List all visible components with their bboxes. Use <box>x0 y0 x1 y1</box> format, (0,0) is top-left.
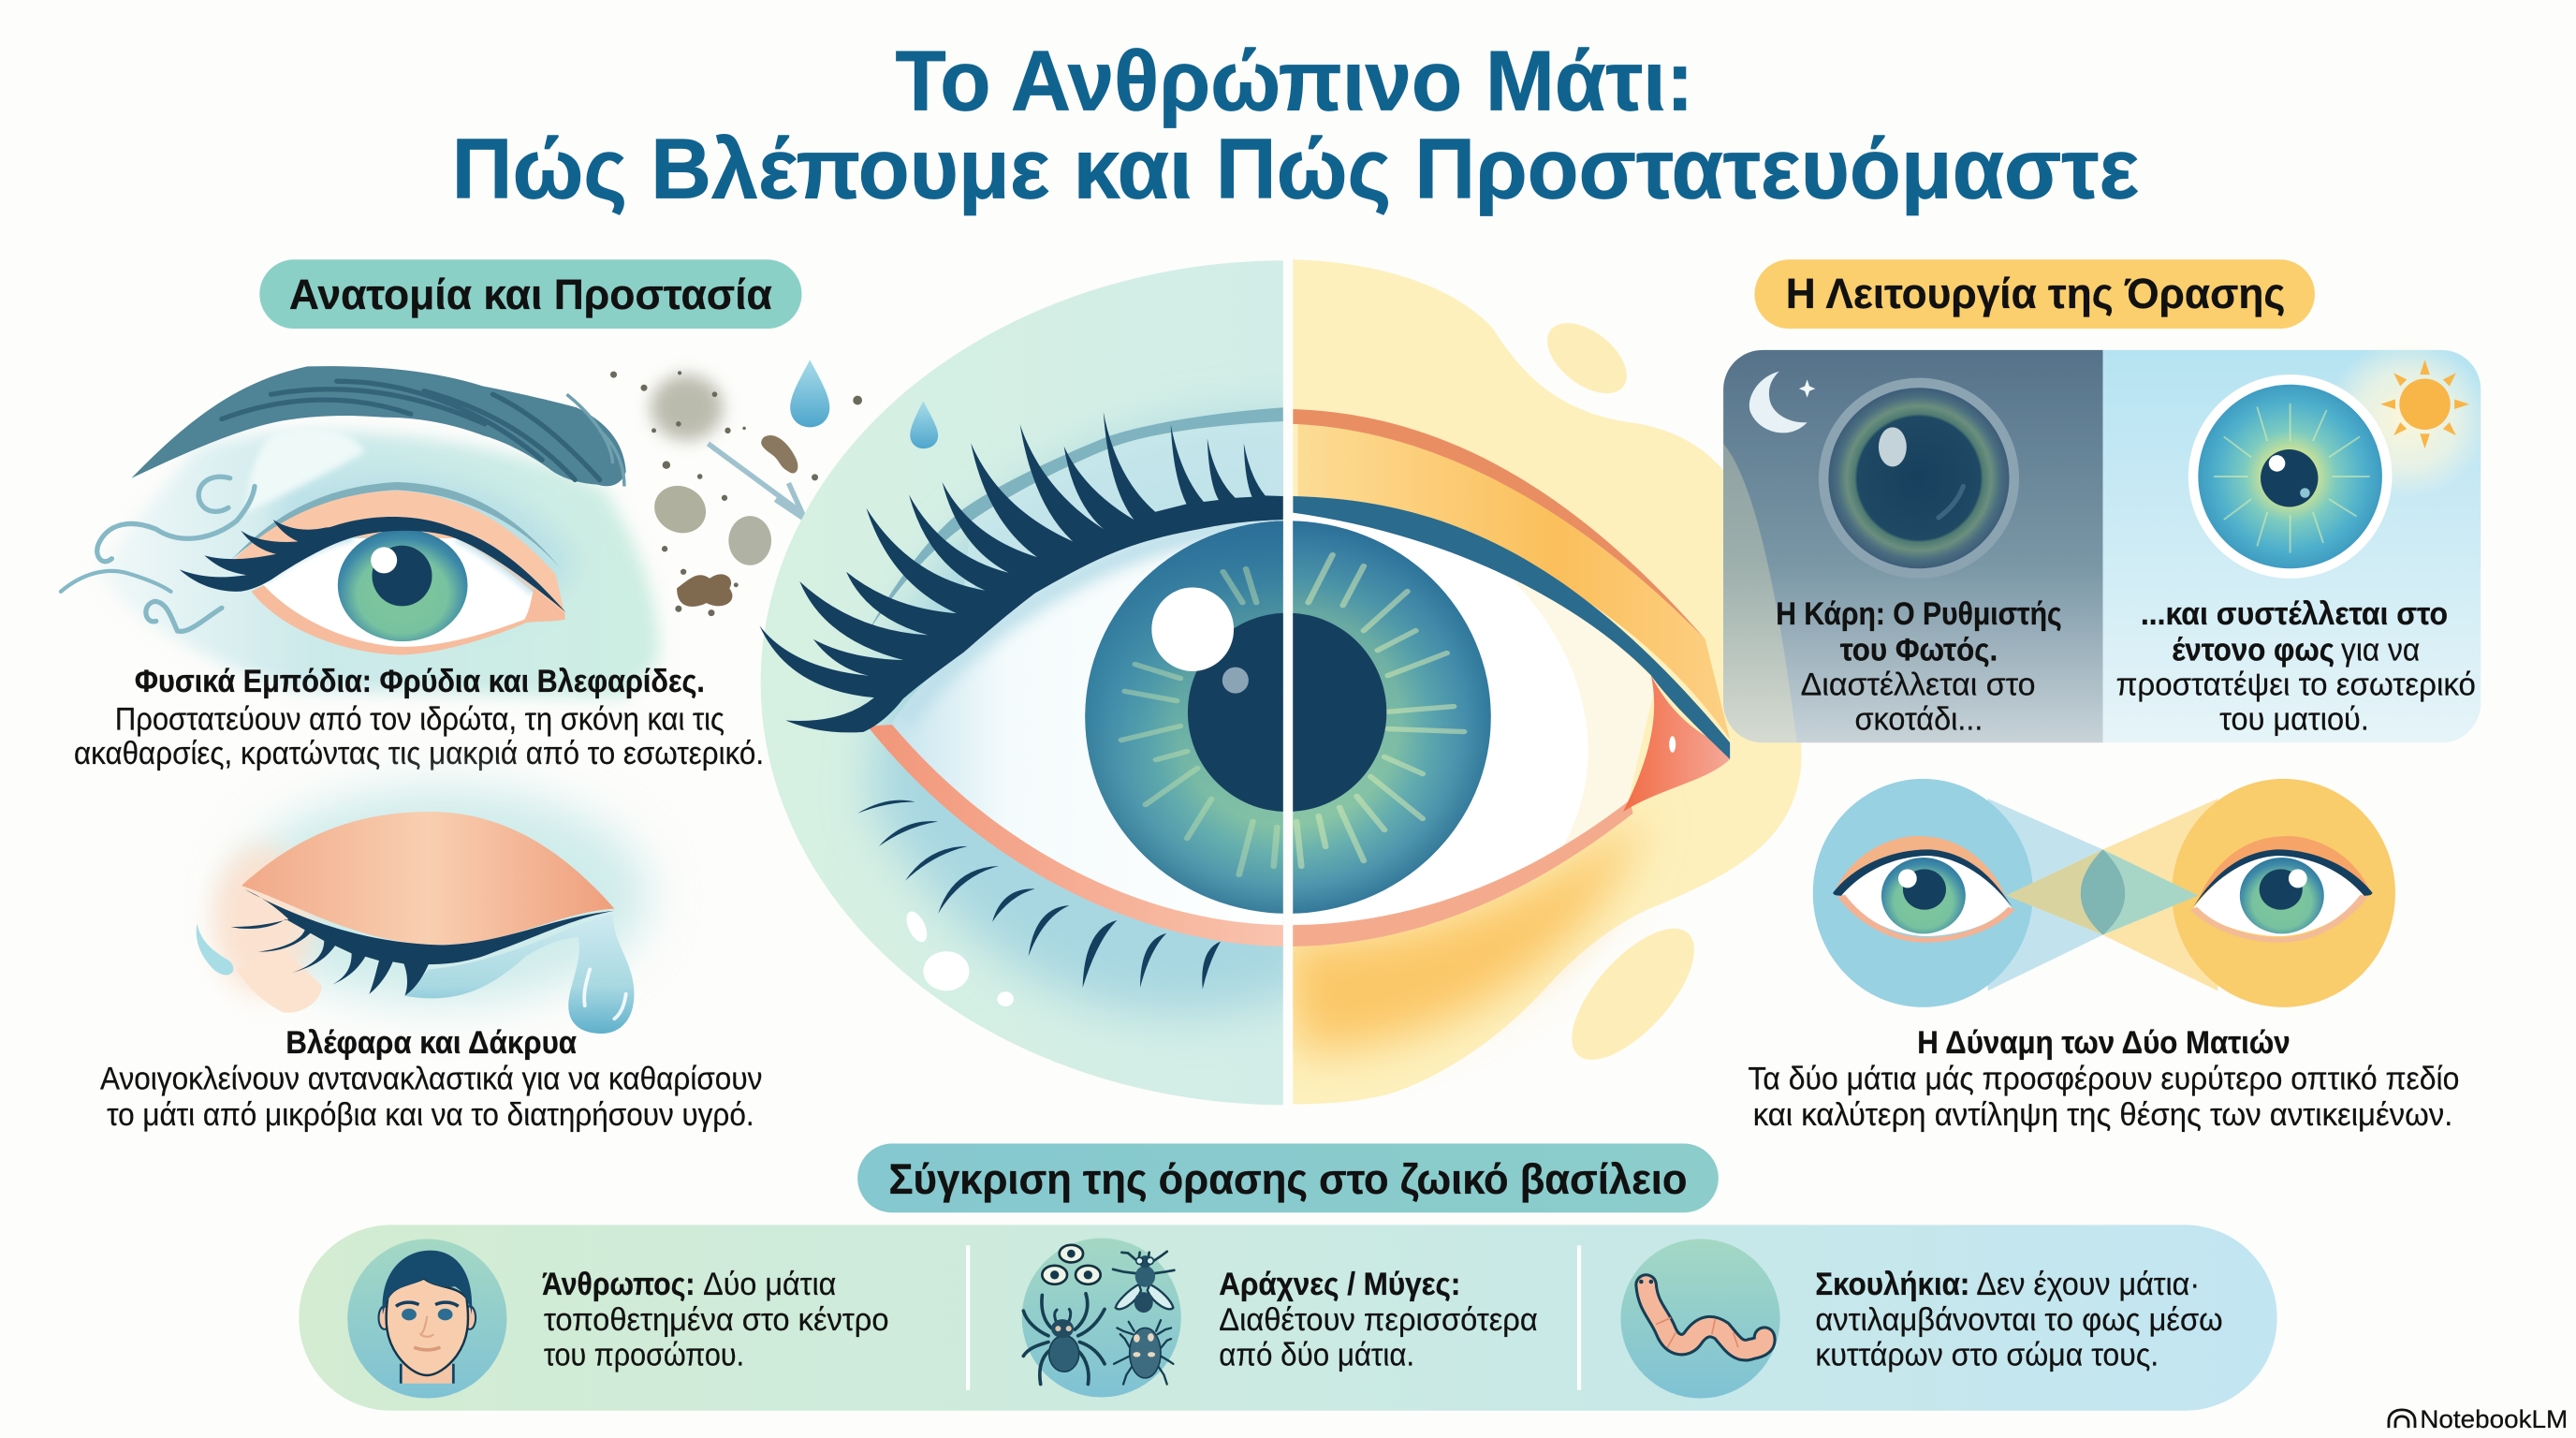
sun <box>2380 360 2469 448</box>
heading pill: anatomy and protection <box>259 259 801 329</box>
eye white left <box>887 513 1288 927</box>
divider <box>1577 1245 1581 1390</box>
right eye <box>2193 836 2372 940</box>
eye white <box>262 538 534 648</box>
dilated pupil eye <box>1819 378 2019 579</box>
eye in detail <box>180 482 566 654</box>
crease line <box>867 407 1286 634</box>
fly <box>1113 1252 1174 1313</box>
left eye <box>1833 836 2012 940</box>
text: worms: Σκουλήκια: <box>1815 1267 1969 1302</box>
illustration: open eye with brow <box>61 366 659 698</box>
left field circle <box>1813 779 2033 1007</box>
lash band <box>231 889 614 995</box>
night side <box>1723 350 2102 743</box>
text: pupil dilates: σκοτάδι... <box>1855 701 1983 737</box>
tear pool and drop <box>404 914 634 1034</box>
icon: worm <box>1620 1239 1780 1399</box>
eye white right <box>1288 513 1656 927</box>
text: pupil contracts <box>2116 596 2476 737</box>
pupil highlight <box>1151 587 1234 671</box>
panel: pupil day and night <box>1723 350 2481 743</box>
text: humans <box>542 1267 889 1372</box>
heading pill: function of vision <box>1754 259 2315 329</box>
iris <box>338 529 468 641</box>
text: pupil dilates: Η Κάρη: Ο Ρυθμιστής <box>1776 596 2062 632</box>
face skin <box>98 432 659 698</box>
small yellow blob top <box>1534 309 1639 407</box>
peach eyelid <box>232 491 565 615</box>
pale lid area under crease <box>964 421 1286 590</box>
overlap <box>2006 849 2103 935</box>
caruncle <box>1623 675 1730 812</box>
upper lid and lashes <box>180 517 566 612</box>
left visual cone <box>1988 799 2103 990</box>
text: humans: Άνθρωπος: <box>542 1267 695 1302</box>
text block: eyelids and tears <box>100 1025 762 1133</box>
text: humans: τοποθετημένα στο κέντρο <box>544 1302 889 1338</box>
illustration: dust and debris <box>610 371 862 616</box>
text: pupil dilates <box>1776 596 2062 737</box>
panel: animal comparison band <box>299 1225 2277 1411</box>
text block: physical barriers: Προστατεύουν από τον ιδρώτα, τη σκόνη και τις <box>115 701 724 737</box>
icon: human face <box>347 1239 506 1399</box>
text: spiders and flies <box>1219 1267 1538 1372</box>
text block: power of two eyes: Η Δύναμη των Δύο Ματιών <box>1917 1025 2291 1061</box>
central eye: left half, protection <box>760 260 1283 1105</box>
text: pupil dilates: του Φωτός. <box>1840 633 1998 668</box>
icon: spiders and flies <box>1022 1238 1181 1398</box>
droplet near dust <box>790 360 829 427</box>
day side <box>2103 340 2489 742</box>
text block: physical barriers: Φυσικά Εμπόδια: Φρύδια και Βλεφαρίδες. <box>135 664 705 699</box>
heading pill: function of vision: Η Λειτουργία της Όρασης <box>1786 270 2285 317</box>
text: pupil contracts: έντονο φως <box>2172 633 2334 668</box>
text: spiders and flies: Διαθέτουν περισσότερα <box>1219 1302 1538 1338</box>
text: worms: αντιλαμβάνονται το φως μέσω <box>1815 1302 2223 1338</box>
text: spiders and flies: από δύο μάτια. <box>1219 1337 1414 1372</box>
upper lid teal <box>1293 496 1730 759</box>
lid crease <box>231 482 561 568</box>
illustration: binocular vision <box>1813 779 2395 1007</box>
skin bit <box>237 945 322 1013</box>
right visual cone <box>2103 799 2217 990</box>
small droplet <box>910 401 938 448</box>
text block: eyelids and tears: Βλέφαρα και Δάκρυα <box>285 1025 577 1061</box>
constricted pupil eye <box>2188 374 2392 579</box>
text block: power of two eyes: Τα δύο μάτια μάς προσφέρουν ευρύτερο οπτικό πεδίο <box>1748 1062 2459 1097</box>
divider <box>966 1245 970 1390</box>
title <box>452 34 2139 216</box>
aqua swirl <box>197 923 233 975</box>
text block: power of two eyes: και καλύτερη αντίληψη της θέσης των αντικειμένων. <box>1753 1097 2452 1133</box>
spider <box>1023 1294 1105 1385</box>
moon and star <box>1749 372 1808 433</box>
text block: eyelids and tears: Ανοιγοκλείνουν αντανακλαστικά για να καθαρίσουν <box>100 1062 762 1097</box>
title: Το Ανθρώπινο Μάτι: <box>896 34 1694 129</box>
lower rim <box>868 725 1288 946</box>
text block: physical barriers <box>74 664 764 771</box>
text: humans: του προσώπου. <box>544 1337 744 1372</box>
lower rim and corner <box>251 585 565 654</box>
text: worms <box>1815 1267 2223 1372</box>
text: pupil contracts: του ματιού. <box>2219 701 2369 737</box>
text: humans: Δύο μάτια <box>703 1267 836 1302</box>
text: pupil dilates: Διαστέλλεται στο <box>1801 667 2036 702</box>
heading pill: animal comparison: Σύγκριση της όρασης στο ζωικό βασίλειο <box>889 1155 1687 1203</box>
text: pupil contracts: προστατέψει το εσωτερικό <box>2116 667 2476 702</box>
heading pill: anatomy and protection: Ανατομία και Προστασία <box>289 271 772 318</box>
lower rim right <box>1288 800 1633 946</box>
warm aura <box>1298 424 1730 740</box>
small yellow blob bottom <box>1551 909 1715 1079</box>
yellow blob behind vision half <box>1293 259 1801 1104</box>
text: pupil contracts: για να <box>2341 633 2420 668</box>
heading pill: animal comparison <box>857 1144 1719 1212</box>
text: pupil contracts: ...και συστέλλεται στο <box>2141 596 2448 632</box>
eyebrow <box>131 366 626 487</box>
upper lid and lashes <box>759 412 1286 732</box>
white dots <box>906 912 927 942</box>
illustration: closed eyelid and tear <box>197 787 649 1034</box>
central eye: right half, function <box>1281 409 1730 1051</box>
text: worms: Δεν έχουν μάτια· <box>1976 1267 2200 1302</box>
beetle <box>1114 1320 1173 1385</box>
wind swirls <box>61 477 255 631</box>
text block: eyelids and tears: το μάτι από μικρόβια και να το διατηρήσουν υγρό. <box>107 1097 754 1133</box>
text block: physical barriers: ακαθαρσίες, κρατώντας τις μακριά από το εσωτερικό. <box>74 736 764 771</box>
logo: NotebookLM: NotebookLM <box>2420 1404 2568 1433</box>
text: worms: κυττάρων στο σώμα τους. <box>1815 1337 2159 1372</box>
text: spiders and flies: Αράχνες / Μύγες: <box>1219 1267 1460 1302</box>
arrow <box>708 444 805 520</box>
text block: power of two eyes <box>1748 1025 2459 1133</box>
right field circle <box>2172 779 2395 1007</box>
lower lashes <box>857 800 1221 990</box>
central iris <box>1085 521 1491 914</box>
title: Πώς Βλέπουμε και Πώς Προστατευόμαστε <box>452 121 2139 216</box>
orange arc <box>1293 409 1705 639</box>
lid <box>242 812 614 945</box>
